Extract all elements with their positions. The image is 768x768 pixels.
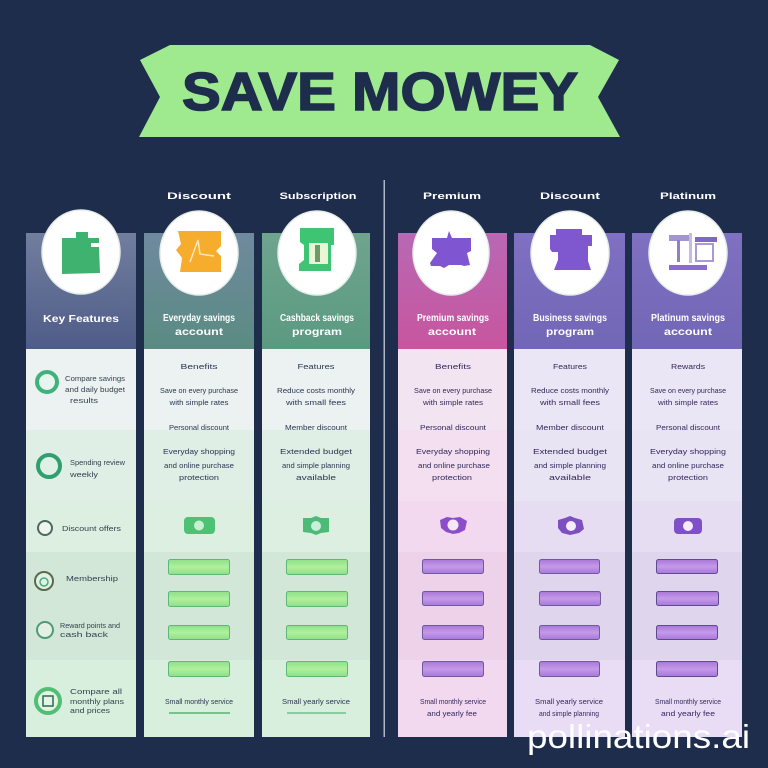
cell text: Benefits: [180, 362, 218, 371]
footer text: [282, 697, 350, 714]
footer text: and yearly fee: [661, 709, 715, 718]
cell text: and simple planning: [282, 461, 350, 470]
cell text: Save on every purchase: [160, 386, 238, 395]
icon: purple star shape: [413, 211, 489, 295]
cell text: and online purchase: [418, 461, 490, 470]
cell text: Features: [298, 362, 335, 371]
cell text: Reduce costs monthly: [277, 386, 355, 395]
cell text: Personal discount: [420, 423, 487, 432]
panel: green plan 2: [262, 191, 370, 737]
footer text: Small monthly service: [420, 697, 486, 706]
footer text: [655, 697, 721, 718]
panel: purple plan 3: [632, 191, 742, 737]
row 2 label: weekly: [69, 470, 98, 479]
icon: purple device: [531, 211, 609, 295]
footer text: Small monthly service: [655, 697, 721, 706]
row 6 label: [36, 687, 124, 715]
row 2 label: [38, 455, 126, 479]
green bars: [286, 560, 348, 676]
title ribbon: [139, 45, 620, 137]
cell text: with simple rates: [168, 398, 229, 407]
icon: green building: [42, 210, 120, 294]
row 6 label: Compare all: [70, 687, 122, 696]
row 3 label: Discount offers: [62, 524, 121, 533]
cell text: Extended budget: [533, 447, 608, 456]
heading: Business savings: [533, 313, 607, 324]
heading: Cashback savings: [280, 313, 354, 324]
row 2 label: Spending review: [70, 458, 126, 467]
footer text: Small yearly service: [535, 697, 603, 706]
footer text: [535, 697, 603, 718]
purple bars: [656, 560, 718, 676]
heading: [280, 313, 354, 338]
cell text: Save on every purchase: [414, 386, 492, 395]
cell text: Personal discount: [656, 423, 721, 432]
plan label: Discount: [167, 191, 231, 201]
watermark: pollinations.ai: [527, 718, 750, 755]
row 1 label: [37, 372, 126, 405]
row 5 label: [37, 621, 120, 639]
cell text: with simple rates: [422, 398, 483, 407]
plan label: Discount: [540, 191, 600, 201]
footer text: Small yearly service: [282, 697, 350, 706]
footer text: and simple planning: [539, 709, 599, 718]
heading: [417, 313, 489, 338]
panel: purple plan 1: [398, 191, 507, 737]
panel: purple plan 2: [514, 191, 625, 737]
row 5 label: Reward points and: [60, 621, 120, 630]
icon: orange card: [160, 211, 238, 295]
row 1 label: results: [70, 396, 98, 405]
cell text: Reduce costs monthly: [531, 386, 609, 395]
cell text: Extended budget: [280, 447, 353, 456]
icon: purple badge: [674, 518, 702, 534]
heading: [163, 313, 235, 338]
title text: SAVE MOWEY: [182, 62, 578, 122]
plan label: Platinum: [660, 191, 716, 201]
cell text: [414, 362, 492, 482]
icon: green badge: [184, 517, 215, 534]
cell text: and online purchase: [652, 461, 724, 470]
row 3 label: [38, 521, 121, 535]
cell text: [160, 362, 238, 482]
panel: features column: [26, 210, 136, 737]
cell text: and simple planning: [534, 461, 606, 470]
cell text: with simple rates: [657, 398, 718, 407]
footer text: and yearly fee: [427, 709, 477, 718]
row 6 label: monthly plans: [70, 697, 124, 706]
cell text: [277, 362, 355, 482]
cell text: protection: [432, 473, 472, 482]
heading: account: [428, 327, 477, 338]
cell text: protection: [668, 473, 708, 482]
cell text: Save on every purchase: [650, 386, 726, 395]
heading: Platinum savings: [651, 313, 725, 324]
cell text: with small fees: [285, 398, 346, 407]
row 1 label: and daily budget: [65, 385, 126, 394]
plan label: Subscription: [280, 191, 356, 201]
purple bars: [540, 560, 600, 676]
icon: green badge: [303, 516, 329, 535]
icon: purple badge: [440, 517, 467, 534]
heading: account: [664, 327, 713, 338]
row 4 label: [35, 572, 118, 590]
heading: Premium savings: [417, 313, 489, 324]
cell text: Everyday shopping: [650, 447, 726, 456]
icon: green device: [278, 211, 356, 295]
row 1 label: Compare savings: [65, 374, 125, 383]
row 4 label: Membership: [66, 574, 118, 583]
cell text: available: [296, 473, 336, 482]
heading: program: [546, 327, 594, 338]
cell text: Member discount: [536, 423, 605, 432]
cell text: Member discount: [285, 423, 348, 432]
row 5 label: cash back: [60, 630, 108, 639]
footer text: [420, 697, 486, 718]
cell text: [531, 362, 609, 482]
cell text: and online purchase: [164, 461, 234, 470]
cell text: Everyday shopping: [163, 447, 235, 456]
heading: account: [175, 327, 224, 338]
heading: program: [292, 327, 342, 338]
green bars: [168, 560, 230, 676]
icon: purple badge: [558, 516, 584, 535]
cell text: [650, 362, 726, 482]
purple bars: [422, 560, 484, 676]
cell text: Everyday shopping: [416, 447, 490, 456]
footer text: [165, 697, 233, 714]
heading: Everyday savings: [163, 313, 235, 324]
footer text: Small monthly service: [165, 697, 233, 706]
column heading: Key Features: [43, 314, 120, 325]
cell text: with small fees: [539, 398, 600, 407]
center divider: [384, 180, 385, 737]
row 6 label: and prices: [70, 706, 110, 715]
cell text: available: [549, 473, 591, 482]
icon: purple pillars: [649, 211, 727, 295]
cell text: protection: [179, 473, 219, 482]
panel: green plan 1: [144, 191, 254, 737]
plan label: Premium: [423, 191, 481, 201]
cell text: Benefits: [435, 362, 471, 371]
heading: [533, 313, 607, 338]
cell text: Features: [553, 362, 587, 371]
cell text: Personal discount: [169, 423, 230, 432]
cell text: Rewards: [671, 362, 705, 371]
heading: [651, 313, 725, 338]
